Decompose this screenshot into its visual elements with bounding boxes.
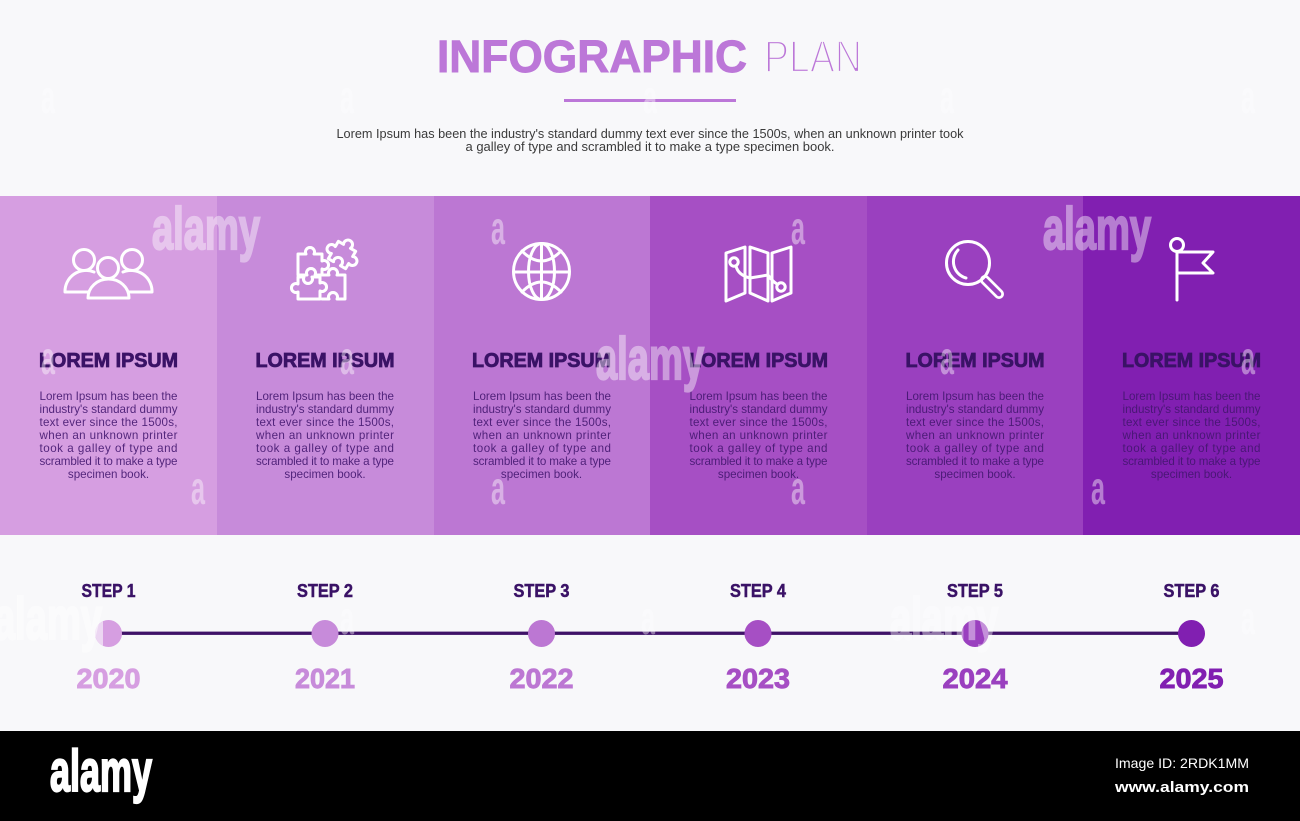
- body text: took a galley of type and: [473, 442, 611, 455]
- title: INFOGRAPHIC: [437, 31, 747, 82]
- watermarks: a: [41, 71, 55, 123]
- panel: step 3: [434, 196, 650, 535]
- body text: Lorem Ipsum has been the: [906, 390, 1044, 403]
- intro text: a galley of type and scrambled it to make a type specimen book.: [466, 139, 834, 154]
- heading: LOREM IPSUM: [256, 350, 394, 372]
- heading: LOREM IPSUM: [906, 350, 1044, 372]
- watermarks: a: [41, 332, 55, 384]
- body text: text ever since the 1500s,: [690, 416, 828, 429]
- title underline: [564, 99, 736, 102]
- watermarks: a: [643, 71, 657, 123]
- body text: Lorem Ipsum has been the: [256, 390, 394, 403]
- watermarks: a: [491, 202, 505, 254]
- body text: specimen book.: [718, 468, 799, 481]
- watermarks: a: [191, 462, 205, 514]
- body text: specimen book.: [68, 468, 149, 481]
- panel: step 5: [867, 196, 1083, 535]
- timeline node: 2022: STEP 3: [514, 580, 570, 601]
- body text: scrambled it to make a type: [690, 455, 828, 468]
- watermarks: a: [340, 332, 354, 384]
- body text: industry's standard dummy: [690, 403, 828, 416]
- panel: step 6: [1083, 196, 1300, 535]
- watermarks: a: [340, 592, 354, 644]
- watermarks: alamy: [596, 326, 704, 392]
- timeline node: 2023: 2023: [726, 663, 790, 694]
- footer bar: [0, 731, 1300, 821]
- body text: when an unknown printer: [905, 429, 1044, 442]
- watermarks: a: [1241, 592, 1255, 644]
- panel: step 2: [217, 196, 434, 535]
- body text: scrambled it to make a type: [473, 455, 611, 468]
- timeline node: 2020: STEP 1: [82, 580, 136, 601]
- timeline node: 2020: 2020: [76, 663, 140, 694]
- body text: Lorem Ipsum has been the: [40, 390, 178, 403]
- body text: text ever since the 1500s,: [906, 416, 1044, 429]
- icon: puzzle: [291, 232, 365, 299]
- body text: [472, 390, 611, 481]
- timeline node: 2020: [76, 580, 140, 694]
- watermarks: alamy: [890, 586, 998, 652]
- body text: industry's standard dummy: [256, 403, 394, 416]
- body text: industry's standard dummy: [40, 403, 178, 416]
- body text: specimen book.: [1151, 468, 1232, 481]
- body text: scrambled it to make a type: [1122, 455, 1260, 468]
- icon: magnifier: [946, 242, 999, 294]
- timeline node: 2024: STEP 5: [947, 580, 1003, 601]
- timeline node: 2025: [1160, 580, 1224, 694]
- watermarks: a: [1241, 332, 1255, 384]
- timeline: [76, 580, 1224, 694]
- body text: Lorem Ipsum has been the: [690, 390, 828, 403]
- body text: text ever since the 1500s,: [473, 416, 611, 429]
- body text: industry's standard dummy: [1122, 403, 1261, 416]
- heading: LOREM IPSUM: [689, 350, 828, 372]
- panel: step 1: [0, 196, 217, 535]
- body text: specimen book.: [501, 468, 582, 481]
- body text: specimen book.: [284, 468, 366, 481]
- watermarks: a: [940, 332, 954, 384]
- body text: took a galley of type and: [690, 442, 828, 455]
- timeline node: 2025: STEP 6: [1164, 580, 1220, 601]
- timeline node: 2022: [510, 580, 574, 694]
- body text: Lorem Ipsum has been the: [1122, 390, 1260, 403]
- watermarks: a: [491, 462, 505, 514]
- body text: scrambled it to make a type: [256, 455, 394, 468]
- timeline node: 2023: STEP 4: [730, 580, 787, 601]
- watermarks: a: [791, 202, 805, 254]
- body text: when an unknown printer: [1122, 429, 1261, 442]
- watermarks: alamy: [152, 196, 260, 262]
- body text: industry's standard dummy: [473, 403, 611, 416]
- body text: when an unknown printer: [38, 429, 178, 442]
- watermarks: alamy: [1043, 196, 1151, 262]
- body text: when an unknown printer: [472, 429, 611, 442]
- body text: [905, 390, 1044, 481]
- timeline node: 2022: 2022: [510, 663, 574, 694]
- panel: step 4: [650, 196, 867, 535]
- heading: LOREM IPSUM: [39, 350, 178, 372]
- title: PLAN: [764, 31, 862, 82]
- timeline node: 2021: 2021: [295, 663, 355, 694]
- body text: when an unknown printer: [688, 429, 828, 442]
- body text: Lorem Ipsum has been the: [473, 390, 611, 403]
- body text: [688, 390, 828, 481]
- body text: when an unknown printer: [255, 429, 394, 442]
- watermarks: a: [1091, 462, 1105, 514]
- intro text: Lorem Ipsum has been the industry's standard dummy text ever since the 1500s, when an unknown printer took: [336, 126, 964, 141]
- website: www.alamy.com: [1114, 779, 1249, 796]
- heading: LOREM IPSUM: [1122, 350, 1261, 372]
- icon: flag: [1170, 238, 1213, 300]
- body text: [255, 390, 394, 481]
- timeline node: 2021: [295, 580, 355, 694]
- icon: map: [726, 247, 791, 301]
- watermarks: a: [340, 71, 354, 123]
- body text: scrambled it to make a type: [40, 455, 178, 468]
- timeline node: 2024: 2024: [942, 663, 1008, 694]
- heading: LOREM IPSUM: [472, 350, 611, 372]
- body text: took a galley of type and: [906, 442, 1044, 455]
- watermarks: a: [1241, 71, 1255, 123]
- image id: Image ID: 2RDK1MM: [1115, 755, 1249, 771]
- timeline node: 2025: 2025: [1160, 663, 1224, 694]
- timeline node: 2021: STEP 2: [297, 580, 353, 601]
- body text: took a galley of type and: [40, 442, 178, 455]
- body text: text ever since the 1500s,: [40, 416, 178, 429]
- intro text: [336, 126, 964, 154]
- watermarks: [0, 71, 1255, 652]
- watermarks: a: [641, 592, 655, 644]
- body text: scrambled it to make a type: [906, 455, 1044, 468]
- footer logo: alamy: [50, 739, 152, 804]
- timeline node: 2024: [942, 580, 1008, 694]
- body text: industry's standard dummy: [906, 403, 1044, 416]
- body text: took a galley of type and: [256, 442, 394, 455]
- body text: specimen book.: [934, 468, 1016, 481]
- body text: text ever since the 1500s,: [1122, 416, 1260, 429]
- body text: text ever since the 1500s,: [256, 416, 394, 429]
- body text: [38, 390, 178, 481]
- timeline node: 2023: [726, 580, 790, 694]
- watermarks: a: [791, 462, 805, 514]
- body text: [1122, 390, 1261, 481]
- watermarks: a: [940, 71, 954, 123]
- body text: took a galley of type and: [1122, 442, 1260, 455]
- icon: people: [65, 250, 152, 298]
- icon: globe: [514, 244, 570, 300]
